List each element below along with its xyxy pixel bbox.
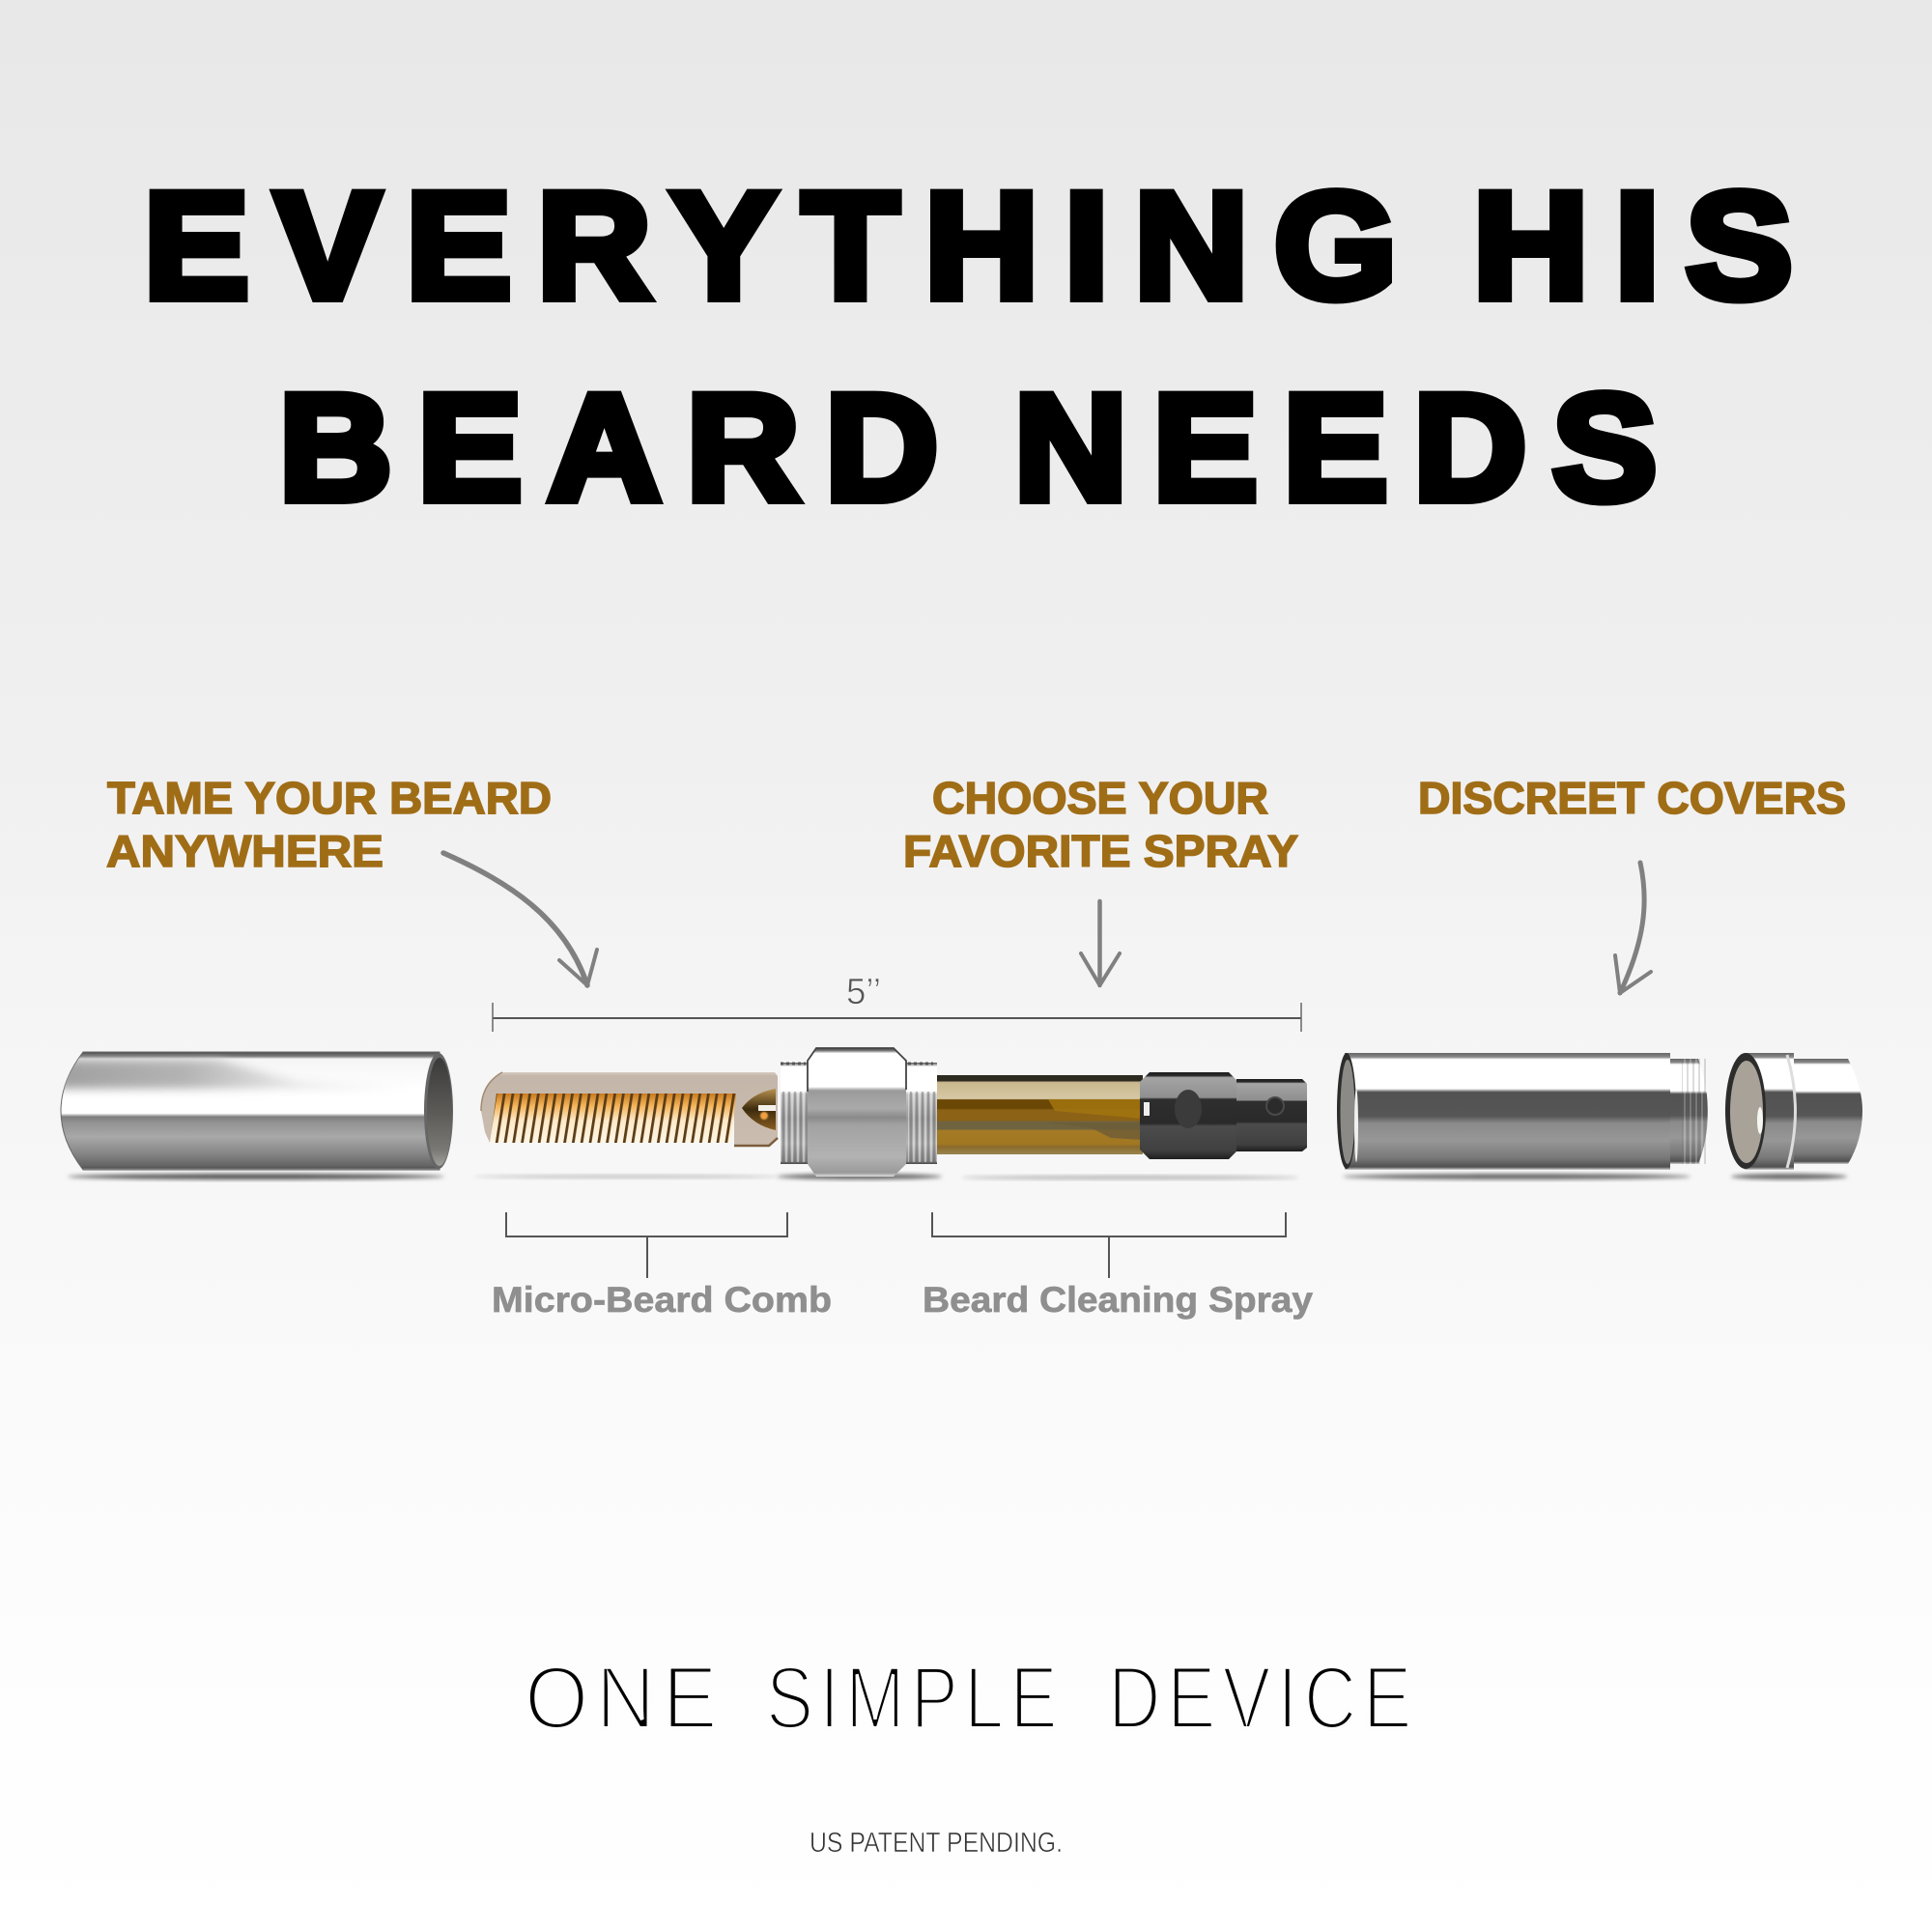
arrow: to comb: [443, 853, 597, 985]
device: black spray collar: [1140, 1072, 1236, 1159]
tagline: SIMPLE: [766, 1649, 1064, 1747]
title: EVERYTHING: [144, 162, 1423, 330]
bracket: micro-beard comb: [492, 1212, 832, 1320]
callout: choose your favorite spray: [903, 773, 1298, 876]
callout: tame your beard anywhere: [106, 773, 552, 876]
dimension line: 5 inches: [493, 972, 1301, 1032]
footnote: US PATENT PENDING.: [810, 1828, 1063, 1859]
label: beard cleaning spray: Beard Cleaning Spray: [923, 1280, 1313, 1320]
arrow: to spray: [1081, 901, 1120, 985]
tagline: [525, 1649, 1418, 1747]
label: micro-beard comb: Micro-Beard Comb: [492, 1280, 832, 1320]
callout: discreet covers: DISCREET COVERS: [1418, 773, 1846, 823]
device: black spray nozzle: [1236, 1079, 1307, 1151]
device: left cover: [58, 1052, 453, 1179]
arrow: to covers: [1615, 863, 1651, 993]
device: end cap: [1725, 1053, 1862, 1179]
callout: choose your favorite spray: FAVORITE SPRAY: [903, 826, 1298, 876]
title: NEEDS: [1014, 364, 1683, 532]
title: [144, 162, 1819, 532]
device: right cover: [1337, 1053, 1708, 1179]
device: central threaded collar: [778, 1048, 942, 1179]
tagline: ONE: [525, 1649, 724, 1747]
bracket: beard cleaning spray: [923, 1212, 1313, 1320]
tagline: DEVICE: [1108, 1649, 1418, 1747]
callout: tame your beard anywhere: TAME YOUR BEARD: [107, 773, 552, 823]
device: micro-beard comb: [473, 1072, 782, 1179]
dimension value: 5’’: [846, 972, 881, 1012]
title: BEARD: [279, 364, 964, 532]
callout: tame your beard anywhere: ANYWHERE: [106, 826, 384, 876]
device: amber spray tube: [937, 1075, 1299, 1179]
callout: choose your favorite spray: CHOOSE YOUR: [932, 773, 1268, 823]
title: HIS: [1473, 162, 1819, 330]
